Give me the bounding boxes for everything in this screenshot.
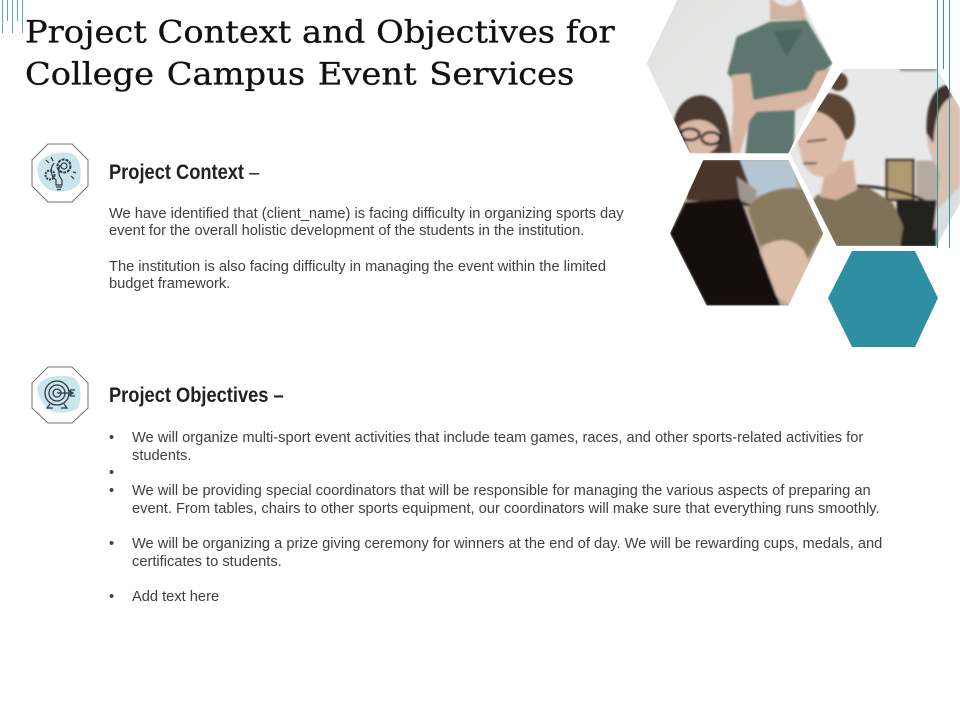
list: project objectives: • [109,430,114,446]
list: project objectives: • [109,483,114,499]
list: project objectives: certificates to students. [132,554,282,570]
list: project objectives: event. From tables, chairs to other sports equipment, our coordinators will make sure that everything runs smoothly. [132,501,880,517]
list: project objectives: students. [132,448,191,464]
icon: target with arrow [32,367,88,423]
text: project context paragraphs: budget framework. [109,276,230,292]
teal hexagon [828,251,938,347]
list: project objectives: Add text here [132,589,219,605]
title: Project Context and Objectives for [25,14,615,50]
list: project objectives: We will be providing special coordinators that will be responsible for managing the various aspects of preparing an [132,483,871,499]
list: project objectives: • [109,465,114,481]
text: project context paragraphs: We have identified that (client_name) is facing difficulty in organizing sports day [109,206,624,222]
icon: lightbulb with gears [32,144,88,202]
list: project objectives: • [109,589,114,605]
top-right thin lines [938,0,950,248]
text: project context paragraphs: The institution is also facing difficulty in managing the event within the limited [109,259,606,275]
heading: project context: Project Context – [109,161,259,184]
title [25,14,615,92]
photo hexagon: standing person and woman with glasses [646,0,832,154]
photo hexagon: woman with hair bun [787,67,960,247]
photo hexagon: laptop and sweater [667,157,827,307]
text: project context paragraphs [109,206,624,292]
list: project objectives [109,430,882,605]
text: project context paragraphs: event for the overall holistic development of the students in the institution. [109,223,584,239]
list: project objectives: • [109,536,114,552]
decorative image group: hexagon photos [2,0,960,424]
heading: project objectives: Project Objectives – [109,384,284,407]
list: project objectives: We will be organizing a prize giving ceremony for winners at the end of day. We will be rewarding cups, medals, and [132,536,882,552]
top-left thin lines [2,0,22,33]
title: College Campus Event Services [25,56,574,92]
list: project objectives: We will organize multi-sport event activities that include team games, races, and other sports-related activities for [132,430,863,446]
